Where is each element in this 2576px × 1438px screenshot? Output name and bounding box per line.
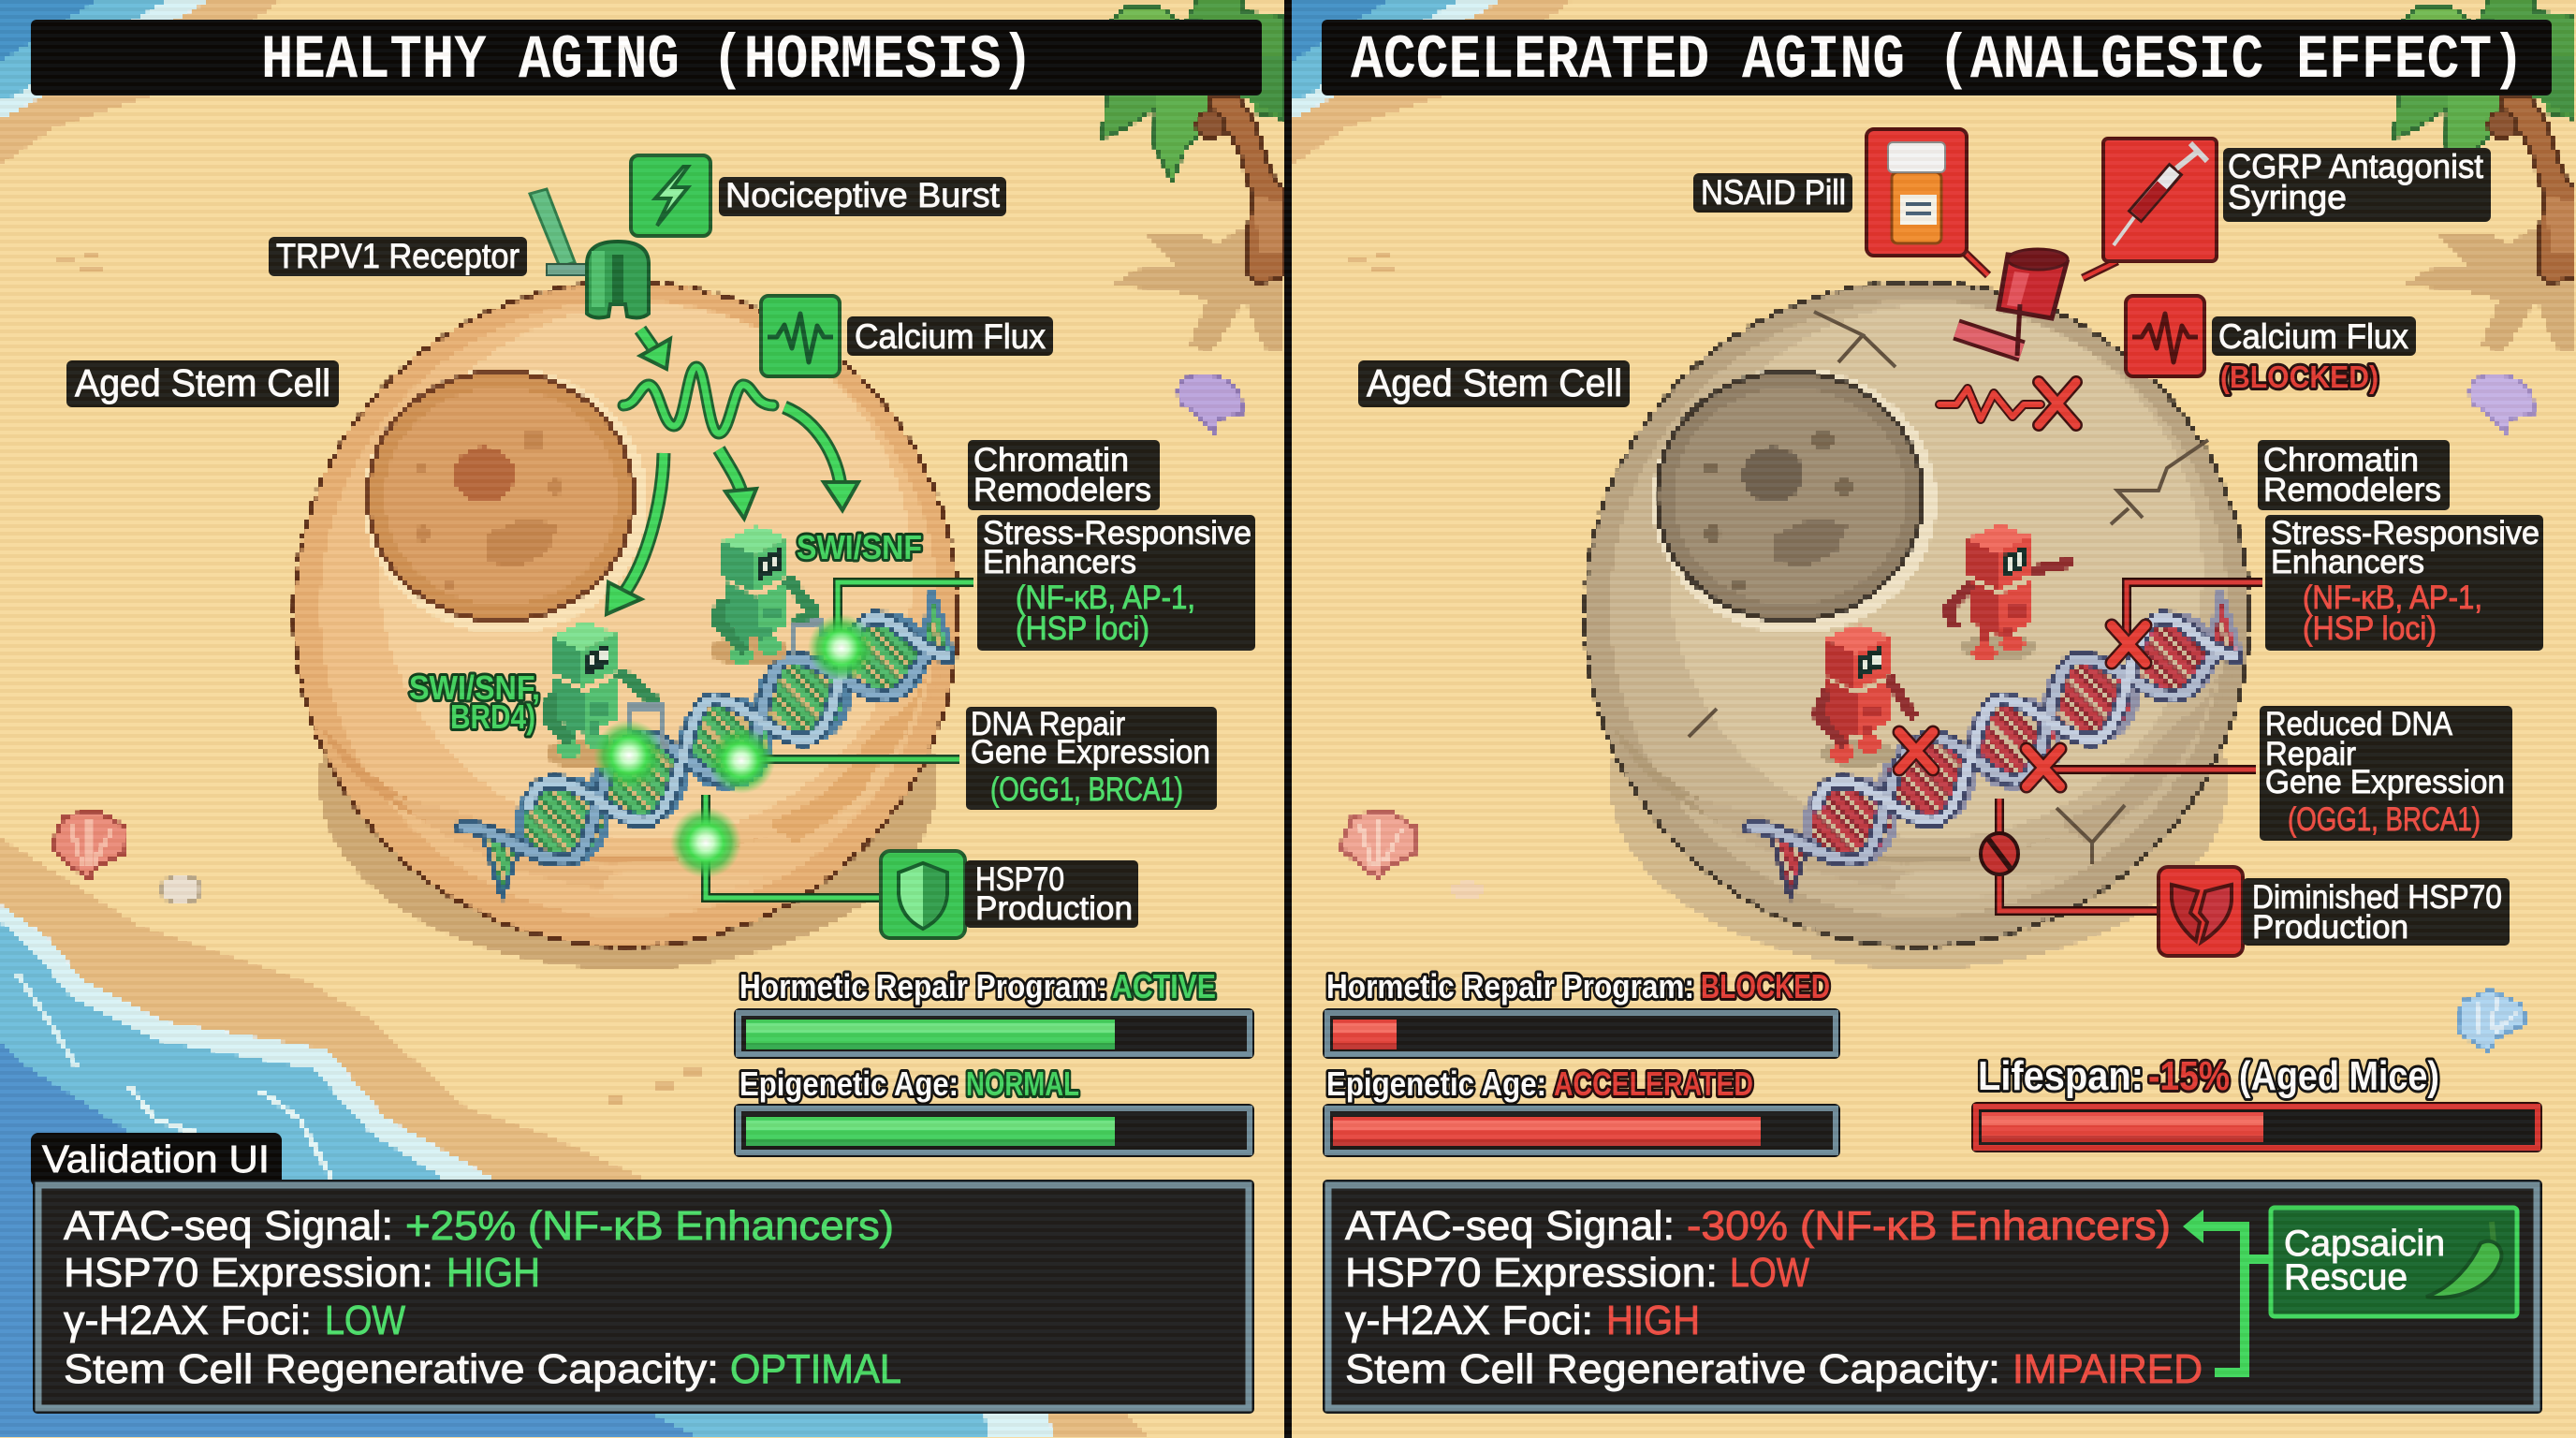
regenerative capacity line: OPTIMAL bbox=[730, 1346, 901, 1392]
regenerative capacity line: IMPAIRED bbox=[2012, 1346, 2203, 1392]
label: DNA Repair Gene Expression bbox=[966, 706, 1217, 810]
icon: NSAID pill bottle bbox=[1866, 129, 1988, 275]
tab: validation UI bbox=[31, 1133, 282, 1187]
icon: chili pepper bbox=[2426, 1222, 2501, 1298]
title: healthy aging bbox=[31, 20, 1262, 95]
panel: validation UI right bbox=[1323, 1180, 2542, 1414]
icon: purple shell bbox=[2470, 374, 2534, 433]
regenerative capacity line: Stem Cell Regenerative Capacity: bbox=[64, 1346, 719, 1392]
glowing activation nodes bbox=[593, 614, 875, 878]
icon: TRPV1 receptor bbox=[530, 189, 649, 317]
label: DNA Repair Gene Expression: (OGG1, BRCA1) bbox=[990, 771, 1183, 808]
robot: inactive upper bbox=[1948, 524, 2073, 662]
label: Stress-Responsive Enhancers: (NF-κB, AP-1, bbox=[2303, 580, 2482, 616]
label: NSAID Pill: NSAID Pill bbox=[1701, 173, 1846, 212]
label: SWI/SNF, BRD4: SWI/SNF, bbox=[409, 668, 540, 707]
ATAC-seq line: ATAC-seq Signal: bbox=[64, 1203, 393, 1249]
top beach, palm and shadow bbox=[0, 0, 1284, 351]
DNA helix bbox=[462, 590, 953, 897]
divider bbox=[1284, 0, 1292, 1438]
status: hormetic repair blocked: BLOCKED bbox=[1701, 967, 1830, 1005]
label: Stress-Responsive Enhancers: (NF-κB, AP-1, bbox=[1016, 580, 1195, 616]
panel: accelerated aging cell bbox=[1585, 249, 2262, 969]
label: HSP70 Production: Production bbox=[975, 890, 1133, 927]
label: HSP70 Production: HSP70 bbox=[975, 861, 1064, 898]
label: Chromatin Remodelers bbox=[968, 440, 1160, 510]
HSP70 line: HSP70 Expression: bbox=[64, 1250, 433, 1296]
gamma-H2AX line: γ-H2AX Foci: bbox=[64, 1298, 312, 1343]
readout box bbox=[1323, 1180, 2542, 1414]
HSP70 line: LOW bbox=[1730, 1250, 1809, 1296]
ATAC-seq line bbox=[1345, 1203, 2171, 1249]
label: Reduced DNA Repair Gene Expression: (OGG1, BRCA1) bbox=[2288, 801, 2481, 838]
icon: lightning burst bbox=[631, 155, 710, 236]
label: HSP70 Production bbox=[965, 860, 1138, 928]
top beach, palm and shadow bbox=[1292, 0, 2576, 351]
label: SWI/SNF: SWI/SNF bbox=[797, 528, 922, 566]
label: Stress-Responsive Enhancers: Enhancers bbox=[983, 544, 1136, 580]
icon: pink shell bbox=[51, 811, 126, 878]
lower shoreline and ocean bbox=[0, 838, 1151, 1438]
label: Calcium Flux: Calcium Flux bbox=[855, 317, 1046, 356]
status: hormetic repair blocked: Hormetic Repair Program: bbox=[1326, 967, 1694, 1005]
callout: capsaicin rescue: Capsaicin bbox=[2284, 1224, 2445, 1264]
right beach scenery bbox=[1292, 0, 2576, 1050]
label: Aged Stem Cell: Aged Stem Cell bbox=[1367, 361, 1622, 404]
status: epigenetic age accelerated: ACCELERATED bbox=[1554, 1064, 1753, 1103]
label: Stress-Responsive Enhancers: Stress-Responsive bbox=[983, 515, 1251, 551]
status: epigenetic age accelerated bbox=[1323, 1064, 1840, 1157]
label: Reduced DNA Repair Gene Expression: Repair bbox=[2265, 736, 2356, 772]
ATAC-seq line: -30% (NF-κB Enhancers) bbox=[1687, 1203, 2171, 1249]
regenerative capacity line: Stem Cell Regenerative Capacity: bbox=[1345, 1346, 2000, 1392]
callout: capsaicin rescue: Rescue bbox=[2284, 1257, 2408, 1298]
label: Stress-Responsive Enhancers: Enhancers bbox=[2271, 544, 2424, 580]
label: Calcium Flux: Calcium Flux bbox=[2218, 317, 2408, 356]
status: lifespan: -15% bbox=[2148, 1053, 2230, 1099]
connector lines bbox=[706, 582, 973, 898]
cell body bbox=[1585, 282, 2249, 946]
icon: pink shell bbox=[1340, 811, 1417, 878]
label: Reduced DNA Repair Gene Expression: Gene Expression bbox=[2265, 764, 2505, 800]
callout: capsaicin rescue bbox=[2271, 1208, 2517, 1316]
panel: validation UI left bbox=[31, 1133, 1254, 1414]
nucleus bbox=[1652, 368, 1937, 634]
nucleus bbox=[363, 368, 648, 634]
HSP70 line: HSP70 Expression: bbox=[1345, 1250, 1718, 1296]
gamma-H2AX line bbox=[1345, 1298, 1700, 1343]
cracks bbox=[1689, 312, 2208, 864]
HSP70 line: HIGH bbox=[446, 1250, 540, 1296]
icon: calcium flux blocked bbox=[2126, 296, 2204, 376]
label: CGRP Antagonist Syringe: Syringe bbox=[2228, 178, 2347, 216]
icon: blue shell bbox=[2458, 990, 2527, 1050]
label: TRPV1 Receptor: TRPV1 Receptor bbox=[276, 237, 520, 275]
status: hormetic repair active: ACTIVE bbox=[1112, 967, 1216, 1005]
label: Diminished HSP70 Production: Production bbox=[2252, 909, 2408, 946]
label: Nociceptive Burst: Nociceptive Burst bbox=[725, 176, 1001, 214]
ATAC-seq line bbox=[64, 1203, 894, 1249]
status: epigenetic age normal: NORMAL bbox=[966, 1064, 1079, 1103]
label: Aged Stem Cell: Aged Stem Cell bbox=[75, 361, 330, 404]
icon: calcium flux bbox=[761, 296, 840, 376]
arrows: signal flow bbox=[607, 330, 858, 614]
label: CGRP Antagonist Syringe bbox=[2223, 147, 2491, 222]
label: DNA Repair Gene Expression: Gene Expression bbox=[971, 734, 1210, 770]
label: CGRP Antagonist Syringe: CGRP Antagonist bbox=[2228, 147, 2483, 185]
label: SWI/SNF, BRD4 bbox=[409, 668, 540, 736]
label: SWI/SNF, BRD4: BRD4) bbox=[450, 697, 535, 736]
gamma-H2AX line: LOW bbox=[325, 1298, 405, 1343]
calcium waveform bbox=[623, 367, 773, 433]
connector lines bbox=[1999, 582, 2262, 911]
sand speckles bbox=[1348, 253, 1396, 272]
icon: white pebble bbox=[161, 875, 200, 903]
tab: validation UI: Validation UI bbox=[42, 1137, 270, 1181]
ATAC-seq line: +25% (NF-κB Enhancers) bbox=[405, 1203, 894, 1249]
left beach scenery bbox=[0, 0, 1284, 1438]
icon: CGRP syringe bbox=[2083, 139, 2217, 278]
sand speckles bbox=[56, 253, 702, 1103]
cell shadow bbox=[1610, 594, 2228, 969]
status: lifespan: Lifespan: bbox=[1978, 1053, 2144, 1099]
status: epigenetic age normal bbox=[734, 1064, 1254, 1157]
DNA helix bbox=[1750, 590, 2241, 897]
label: Stress-Responsive Enhancers bbox=[2265, 515, 2543, 651]
blocked waveform bbox=[1939, 382, 2076, 425]
arrow: capsaicin rescue bracket bbox=[2183, 1210, 2271, 1372]
icon: faded pebble bbox=[1451, 882, 1485, 899]
status: hormetic repair blocked bbox=[1323, 967, 1840, 1059]
label: Reduced DNA Repair Gene Expression: Reduced DNA bbox=[2265, 706, 2453, 742]
blocked node bbox=[1981, 833, 2018, 874]
label: Stress-Responsive Enhancers: Stress-Responsive bbox=[2271, 515, 2539, 551]
readout box bbox=[33, 1180, 1254, 1414]
status: lifespan bbox=[1971, 1053, 2542, 1152]
status: hormetic repair active bbox=[734, 967, 1254, 1059]
ATAC-seq line: ATAC-seq Signal: bbox=[1345, 1203, 1675, 1249]
title: healthy aging: HEALTHY AGING (HORMESIS) bbox=[261, 25, 1033, 95]
status: epigenetic age normal: Epigenetic Age: bbox=[739, 1064, 959, 1103]
robot: inactive lower bbox=[1818, 624, 1914, 767]
label: Chromatin Remodelers: Chromatin bbox=[2263, 442, 2419, 478]
cell body bbox=[294, 282, 959, 946]
label: Stress-Responsive Enhancers: (HSP loci) bbox=[1016, 610, 1149, 647]
panel: healthy aging cell bbox=[294, 189, 973, 969]
X marks on DNA bbox=[1899, 625, 2145, 786]
label: Diminished HSP70 Production bbox=[2243, 878, 2510, 946]
cell shadow bbox=[319, 594, 937, 969]
status: hormetic repair active: Hormetic Repair Program: bbox=[739, 967, 1107, 1005]
label: Stress-Responsive Enhancers bbox=[977, 515, 1255, 651]
label: Chromatin Remodelers bbox=[2258, 440, 2450, 510]
icon: shield bbox=[881, 851, 965, 938]
label: Stress-Responsive Enhancers: (HSP loci) bbox=[2303, 610, 2437, 647]
status: lifespan: (Aged Mice) bbox=[2239, 1053, 2439, 1099]
robot: SWI/SNF bbox=[710, 526, 824, 666]
label: Diminished HSP70 Production: Diminished HSP70 bbox=[2252, 879, 2502, 916]
label: DNA Repair Gene Expression: DNA Repair bbox=[971, 706, 1125, 742]
status: epigenetic age accelerated: Epigenetic Age: bbox=[1326, 1064, 1546, 1103]
icon: purple shell bbox=[1178, 374, 1242, 433]
label: Reduced DNA Repair Gene Expression bbox=[2260, 706, 2512, 841]
icon: blocked receptor bbox=[1956, 249, 2068, 356]
label: blocked: (BLOCKED) bbox=[2220, 360, 2378, 394]
icon: broken heart bbox=[2159, 867, 2243, 956]
robot: SWI/SNF, BRD4 bbox=[546, 622, 665, 769]
label: Chromatin Remodelers: Remodelers bbox=[973, 472, 1151, 508]
label: Chromatin Remodelers: Remodelers bbox=[2263, 472, 2441, 508]
label: Chromatin Remodelers: Chromatin bbox=[973, 442, 1129, 478]
gamma-H2AX line: γ-H2AX Foci: bbox=[1345, 1298, 1593, 1343]
gamma-H2AX line: HIGH bbox=[1606, 1298, 1700, 1343]
